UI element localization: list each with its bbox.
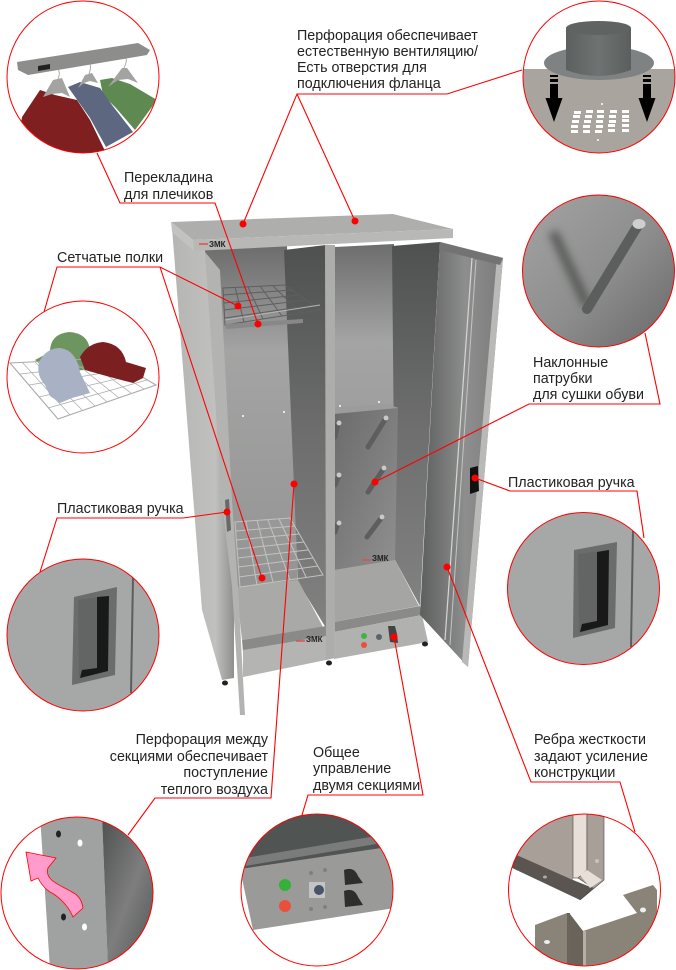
detail circle: stiffening ribs <box>505 810 665 970</box>
cabinet right bottom rail <box>334 606 422 632</box>
leader: left handle <box>40 512 227 572</box>
label: perforation between sections: теплого воздуха <box>161 782 268 798</box>
detail circle: flange and perforation <box>524 21 674 152</box>
left door <box>205 252 245 715</box>
label: stiffening ribs: конструкции <box>534 765 615 781</box>
key switch <box>309 882 325 898</box>
leader: perforation top <box>243 70 522 224</box>
label: stiffening ribs: Ребра жесткости <box>534 732 646 748</box>
label: inclined tubes: патрубки <box>533 371 592 387</box>
circle outline: control panel <box>241 814 393 966</box>
logo text: ЗМК <box>209 240 226 249</box>
leader: wire shelves <box>44 267 238 312</box>
small holes <box>309 868 327 911</box>
circle outline: handle left <box>7 559 159 711</box>
grey-blue cap <box>38 348 90 403</box>
right door <box>420 242 503 667</box>
control panel switches <box>361 633 367 639</box>
upper plate lower band <box>508 853 593 900</box>
label: ventilation perforation: Есть отверстия для <box>297 60 427 76</box>
cabinet left compartment back wall <box>205 246 298 597</box>
leader lines <box>40 70 660 835</box>
tube end cap <box>632 219 646 229</box>
wire grid <box>10 358 156 419</box>
tube caps <box>336 416 388 526</box>
circle outline: perforation <box>1 817 153 969</box>
leader: right handle <box>475 478 644 538</box>
channel flange <box>578 810 604 900</box>
leader: hanger bar <box>97 153 258 324</box>
circle outline: inclined tube <box>522 195 674 347</box>
post face <box>40 815 108 970</box>
cabinet right compartment back wall <box>335 244 396 570</box>
leader dots <box>224 218 478 640</box>
right door plastic handle <box>470 466 479 494</box>
shoe drying box <box>334 407 398 570</box>
cabinet left compartment floor <box>236 580 323 640</box>
label: perforation between sections: поступление <box>183 765 268 781</box>
logo text <box>199 240 389 644</box>
switches <box>344 869 363 885</box>
circle outline: stiffening ribs <box>508 814 660 966</box>
lower wire shelf <box>235 518 323 587</box>
label: perforation between sections: секциями обеспечивает <box>110 749 268 765</box>
control panel base <box>334 615 428 659</box>
label: plastic handle left: Пластиковая ручка <box>57 501 184 517</box>
upper wire shelf <box>223 285 320 325</box>
tube <box>587 227 637 309</box>
panel face <box>240 846 395 930</box>
door edge line <box>131 577 133 693</box>
arrow right <box>638 75 656 122</box>
detail circle: inclined shoe tube <box>520 190 676 350</box>
clothes: blue <box>68 82 133 147</box>
handle <box>573 542 617 638</box>
cabinet: open drying cabinet with two sections <box>171 214 503 715</box>
feet <box>222 642 428 686</box>
label: perforation between sections: Перфорация между <box>136 732 268 748</box>
detail circle: plastic handle left <box>8 560 158 710</box>
detail circle: plastic handle right <box>508 513 659 664</box>
red button <box>279 900 291 912</box>
upper plate <box>505 810 573 880</box>
label: hanger bar: Перекладина <box>124 170 213 186</box>
leader: inclined tubes <box>375 333 660 482</box>
label: inclined tubes: для сушки обуви <box>533 387 644 403</box>
circle outline: caps <box>7 301 159 453</box>
label: common control: двумя секциями <box>313 778 420 794</box>
tube shadow <box>553 232 587 305</box>
label: ventilation perforation: естественную вентиляцию/ <box>297 44 478 60</box>
front band <box>193 229 453 251</box>
logo text: ЗМК <box>306 635 323 644</box>
cabinet left side panel <box>172 228 234 680</box>
leader: ribs <box>447 567 635 832</box>
label: hanger bar: для плечиков <box>124 187 213 203</box>
center post <box>325 245 335 660</box>
roof plate <box>524 69 674 152</box>
left door plastic handle <box>225 499 231 532</box>
lower bracket <box>535 885 657 970</box>
detail circle: hanger bar with clothes <box>17 43 156 152</box>
label: stiffening ribs: задают усиление <box>534 749 648 765</box>
label: ventilation perforation: Перфорация обеспечивает <box>297 28 478 44</box>
green button <box>279 879 291 891</box>
label: common control: управление <box>313 761 391 777</box>
dark rail background <box>244 814 380 868</box>
cabinet left bottom rail <box>242 626 326 652</box>
side wall <box>102 822 152 962</box>
holes <box>56 830 87 930</box>
label: plastic handle right: Пластиковая ручка <box>508 475 635 491</box>
flange ring <box>544 46 654 80</box>
channel inner <box>573 810 587 878</box>
circle outline: handle right <box>508 512 660 664</box>
arrow left <box>546 75 562 122</box>
hanger bar <box>17 43 150 75</box>
cabinet right compartment floor <box>334 560 419 622</box>
label: inclined tubes: Наклонные <box>533 355 608 371</box>
label: ventilation perforation: подключения фланца <box>297 76 441 92</box>
detail circle: control panel <box>242 814 392 930</box>
cabinet right compartment side wall <box>392 242 440 606</box>
vent slots <box>571 103 629 141</box>
circle outline: hanger bar <box>7 1 159 153</box>
green cap <box>35 332 90 372</box>
circle outline: flange <box>523 1 675 153</box>
shoe drying tubes <box>335 418 386 537</box>
detail circle: perforation between sections <box>26 818 152 968</box>
hangers <box>43 68 138 97</box>
red cap <box>80 342 146 383</box>
pipe <box>566 28 631 76</box>
label: wire shelves: Сетчатые полки <box>57 250 163 266</box>
holes <box>543 859 646 944</box>
handle <box>72 587 117 685</box>
top lid <box>171 214 453 240</box>
leader: common control <box>302 637 423 815</box>
cabinet left base panel <box>243 636 326 677</box>
clothes: red <box>22 90 104 152</box>
detail circle: caps on wire shelf <box>9 332 158 420</box>
clothes: green <box>100 78 157 130</box>
hanger rail <box>225 319 303 329</box>
cabinet left compartment side wall <box>284 245 326 628</box>
logo text: ЗМК <box>372 554 389 563</box>
airflow arrow <box>26 852 83 917</box>
perforation holes <box>242 401 380 417</box>
label: common control: Общее <box>313 745 360 761</box>
leader: section perforation <box>128 484 294 835</box>
door edge line <box>631 530 633 647</box>
